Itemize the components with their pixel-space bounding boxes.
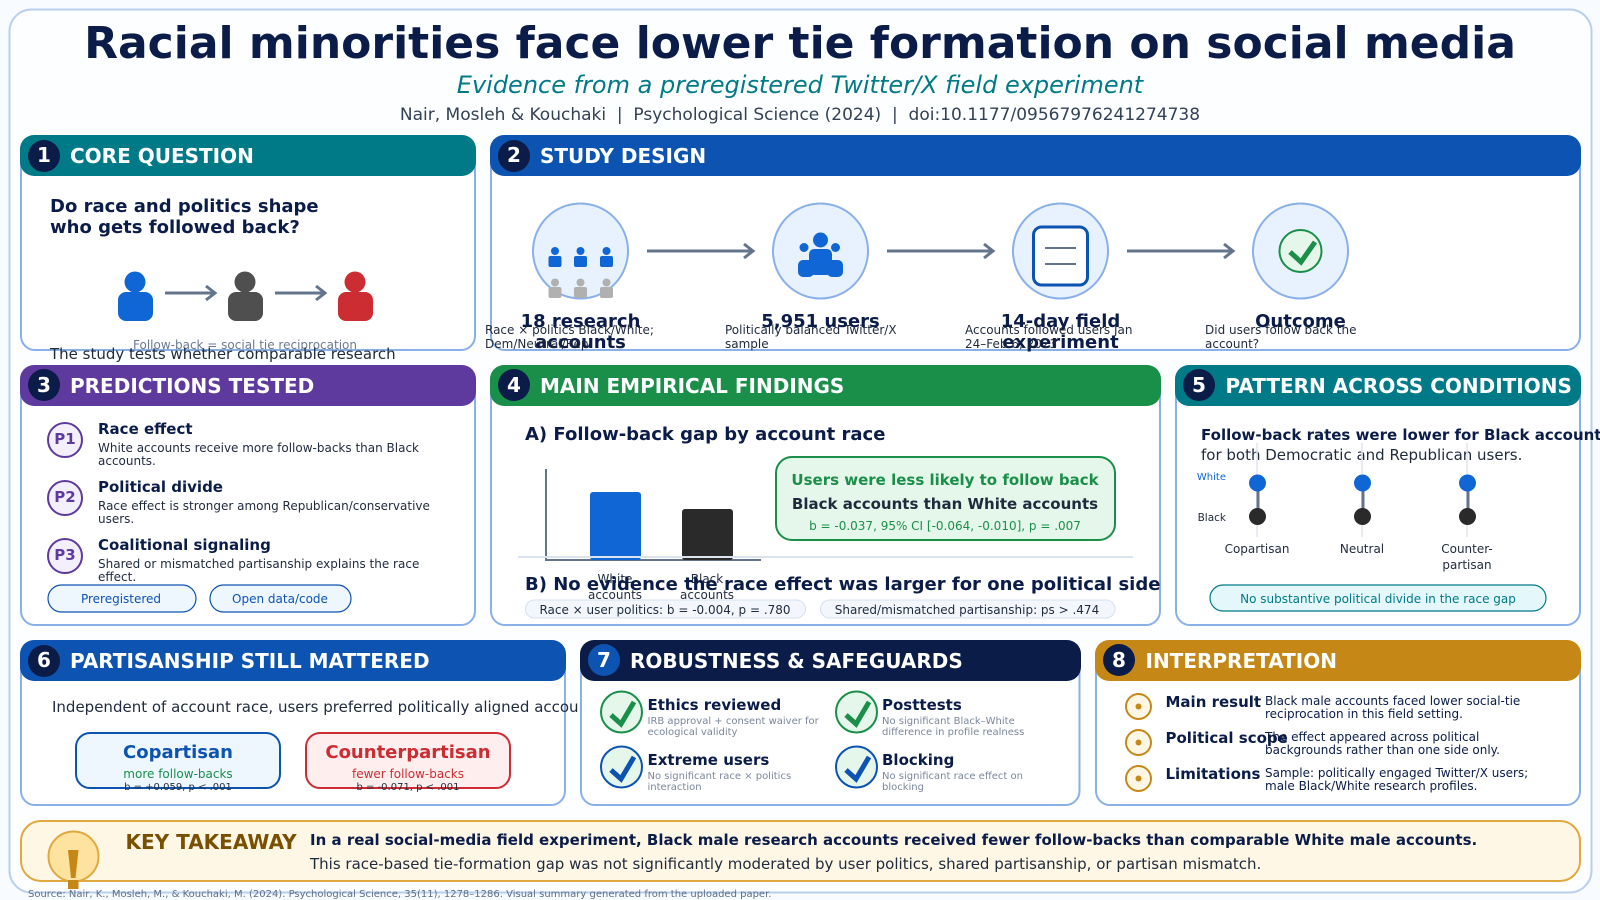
dot plot: conditions: Neutral bbox=[1340, 542, 1384, 556]
card: counterpartisan: fewer follow-backs bbox=[352, 767, 464, 781]
step label: field experiment: 14-day field bbox=[1001, 311, 1120, 332]
step text: users: sample bbox=[725, 337, 769, 351]
panel: main findings bbox=[490, 365, 1161, 625]
icon: users bbox=[773, 204, 868, 298]
bar chart: follow-back gap bbox=[518, 469, 1133, 602]
question heading: Do race and politics shape bbox=[50, 196, 319, 217]
item: political scope bbox=[1126, 729, 1500, 757]
item: ethics: Ethics reviewed bbox=[648, 696, 781, 714]
item: limitations: Limitations bbox=[1166, 765, 1261, 783]
prediction P1: White accounts receive more follow-backs than Black bbox=[98, 441, 419, 455]
header: core question: CORE QUESTION bbox=[70, 144, 254, 168]
icon: document bbox=[1013, 204, 1108, 298]
header: pattern bbox=[1175, 365, 1581, 406]
dot plot: conditions bbox=[1197, 443, 1493, 572]
header: main findings: MAIN EMPIRICAL FINDINGS bbox=[540, 374, 844, 398]
card: copartisan bbox=[76, 733, 280, 793]
header: interpretation: INTERPRETATION bbox=[1146, 649, 1337, 673]
callout: result bbox=[776, 457, 1115, 540]
intro text: The study tests whether comparable research bbox=[49, 345, 396, 363]
item: blocking bbox=[836, 746, 1023, 793]
prediction P1: Race effect bbox=[98, 420, 193, 438]
step text: field experiment: 24–Feb 6, 2023 bbox=[965, 337, 1057, 351]
item: limitations: male Black/White research profiles. bbox=[1265, 779, 1478, 793]
stat pill: interaction: Race × user politics: b = -0.004, p = .780 bbox=[539, 603, 791, 617]
takeaway subtext: This race-based tie-formation gap was not significantly moderated by user politics, shared partisanship, or partisan mismatch. bbox=[309, 855, 1261, 873]
step label: accounts: accounts bbox=[535, 332, 626, 353]
pattern text: Follow-back rates were lower for Black accounts bbox=[1201, 426, 1600, 444]
badge: open data bbox=[210, 585, 351, 612]
bar chart: follow-back gap: accounts bbox=[680, 588, 734, 602]
header: pattern: PATTERN ACROSS CONDITIONS bbox=[1226, 374, 1572, 398]
heading A: A) Follow-back gap by account race bbox=[525, 424, 885, 445]
item: political scope: The effect appeared across political bbox=[1264, 730, 1479, 744]
panel: key takeaway bbox=[21, 821, 1580, 889]
header: study design bbox=[490, 135, 1581, 176]
header: study design: STUDY DESIGN bbox=[540, 144, 706, 168]
bar chart: follow-back gap: accounts bbox=[588, 588, 642, 602]
header: interpretation: 8 bbox=[1112, 648, 1126, 672]
icon: blue person bbox=[118, 272, 153, 321]
title: Racial minorities face lower tie formation on social media bbox=[84, 18, 1516, 69]
item: extreme users: No significant race × politics bbox=[648, 771, 791, 782]
item: limitations: Sample: politically engaged Twitter/X users; bbox=[1265, 766, 1528, 780]
callout: result: Users were less likely to follow back bbox=[791, 471, 1100, 489]
step text: field experiment: Accounts followed users Jan bbox=[965, 323, 1132, 337]
prediction P3: effect. bbox=[98, 570, 136, 584]
card: copartisan: more follow-backs bbox=[123, 767, 233, 781]
partisanship text: Independent of account race, users preferred politically aligned accounts. bbox=[52, 698, 607, 716]
header: partisanship: 6 bbox=[37, 648, 51, 672]
bar chart: follow-back gap: Black bbox=[691, 572, 723, 586]
header: interpretation bbox=[1095, 640, 1581, 681]
panel: partisanship bbox=[20, 640, 607, 805]
item: extreme users: Extreme users bbox=[648, 751, 769, 769]
header: robustness: 7 bbox=[597, 648, 611, 672]
header: robustness bbox=[580, 640, 1081, 681]
item: main result: Black male accounts faced lower social-tie bbox=[1265, 694, 1520, 708]
header: partisanship: PARTISANSHIP STILL MATTERED bbox=[70, 649, 430, 673]
dot plot: conditions: partisan bbox=[1442, 558, 1492, 572]
prediction P2: Political divide bbox=[98, 478, 223, 496]
card: counterpartisan: Counterpartisan bbox=[325, 742, 491, 763]
icon: red person bbox=[338, 272, 373, 321]
step label: users: 5,951 users bbox=[761, 311, 880, 332]
heading B: B) No evidence the race effect was larger for one political side bbox=[525, 574, 1160, 595]
item: political scope: backgrounds rather than one side only. bbox=[1265, 743, 1500, 757]
citation line: Nair, Mosleh & Kouchaki | Psychological Science (2024) | doi:10.1177/09567976241274738 bbox=[400, 105, 1200, 125]
pill: no political divide bbox=[1210, 585, 1546, 611]
dot plot: conditions: Black bbox=[1198, 512, 1227, 524]
panel: predictions bbox=[20, 365, 476, 625]
panel: core question bbox=[20, 135, 476, 363]
item: blocking: blocking bbox=[882, 782, 924, 793]
icon: research accounts bbox=[533, 204, 628, 298]
prediction P2: Race effect is stronger among Republican/conservative bbox=[98, 499, 430, 513]
step text: outcome: Did users follow back the bbox=[1205, 323, 1356, 337]
item: main result bbox=[1126, 693, 1520, 721]
icon: grey person bbox=[228, 272, 263, 321]
header: main findings: 4 bbox=[507, 373, 521, 397]
item: main result: Main result bbox=[1166, 693, 1261, 711]
card: counterpartisan: b = -0.071, p < .001 bbox=[356, 782, 460, 793]
step label: field experiment: experiment bbox=[1002, 332, 1119, 353]
item: ethics bbox=[601, 692, 820, 738]
item: posttests bbox=[836, 692, 1024, 738]
callout: result: Black accounts than White accounts bbox=[792, 495, 1098, 513]
badge: preregistered: Preregistered bbox=[81, 592, 161, 606]
card: copartisan: Copartisan bbox=[123, 742, 233, 763]
header: predictions: PREDICTIONS TESTED bbox=[70, 374, 314, 398]
stat pill: interaction bbox=[526, 600, 806, 618]
header: core question bbox=[20, 135, 476, 176]
arrow bbox=[275, 286, 325, 300]
caption: follow-back: Follow-back = social tie reciprocation bbox=[133, 338, 357, 352]
prediction P3: Coalitional signaling bbox=[98, 536, 271, 554]
takeaway heading: KEY TAKEAWAY bbox=[126, 830, 297, 854]
dot plot: conditions: Counter- bbox=[1441, 542, 1493, 556]
prediction P3: Shared or mismatched partisanship explains the race bbox=[98, 557, 419, 571]
item: posttests: difference in profile realness bbox=[882, 727, 1024, 738]
prediction P1 bbox=[48, 420, 419, 468]
item: posttests: No significant Black–White bbox=[882, 716, 1015, 727]
dot plot: conditions: White bbox=[1197, 472, 1226, 483]
takeaway text: In a real social-media field experiment, Black male research accounts received fewer follow-backs than comparable White male accounts. bbox=[310, 831, 1477, 849]
header: study design: 2 bbox=[507, 143, 521, 167]
step text: outcome: account? bbox=[1205, 337, 1259, 351]
prediction P3 bbox=[48, 536, 419, 584]
panel: interpretation bbox=[1095, 640, 1581, 805]
header: main findings bbox=[490, 365, 1161, 406]
subtitle: Evidence from a preregistered Twitter/X field experiment bbox=[457, 71, 1145, 99]
item: extreme users: interaction bbox=[648, 782, 702, 793]
step label: outcome: Outcome bbox=[1255, 311, 1346, 332]
panel: pattern across conditions bbox=[1175, 365, 1600, 625]
item: main result: reciprocation in this field setting. bbox=[1265, 707, 1463, 721]
stat pill: partisanship: Shared/mismatched partisanship: ps > .474 bbox=[835, 603, 1099, 617]
panel: robustness bbox=[580, 640, 1081, 805]
item: blocking: No significant race effect on bbox=[882, 771, 1023, 782]
stat pill: partisanship bbox=[820, 600, 1115, 618]
prediction P1: accounts. bbox=[98, 454, 156, 468]
badge: open data: Open data/code bbox=[232, 592, 328, 606]
item: ethics: IRB approval + consent waiver for bbox=[648, 716, 820, 727]
header: pattern: 5 bbox=[1192, 373, 1206, 397]
prediction P3: P3 bbox=[54, 546, 76, 564]
prediction P2: users. bbox=[98, 512, 134, 526]
step text: accounts: Race × politics Black/White; bbox=[485, 323, 654, 337]
step text: users: Politically balanced Twitter/X bbox=[725, 323, 897, 337]
prediction P2: P2 bbox=[54, 488, 76, 506]
header: predictions: 3 bbox=[37, 373, 51, 397]
header: core question: 1 bbox=[37, 143, 51, 167]
arrow bbox=[647, 244, 753, 258]
header: partisanship bbox=[20, 640, 566, 681]
card: copartisan: b = +0.059, p < .001 bbox=[124, 782, 232, 793]
question heading: who gets followed back? bbox=[50, 217, 300, 238]
item: ethics: ecological validity bbox=[648, 727, 738, 738]
prediction P2 bbox=[48, 478, 430, 526]
dot plot: conditions: Copartisan bbox=[1225, 542, 1289, 556]
icon: outcome check bbox=[1253, 204, 1348, 298]
item: blocking: Blocking bbox=[882, 751, 954, 769]
icon: exclamation bbox=[48, 832, 98, 889]
panel: study design bbox=[485, 135, 1581, 353]
header: robustness: ROBUSTNESS & SAFEGUARDS bbox=[630, 649, 963, 673]
header: predictions bbox=[20, 365, 476, 406]
step label: accounts: 18 research bbox=[521, 311, 640, 332]
arrow bbox=[887, 244, 993, 258]
card: counterpartisan bbox=[306, 733, 510, 793]
pill: no political divide: No substantive political divide in the race gap bbox=[1240, 592, 1516, 606]
source line: Source: Nair, K., Mosleh, M., & Kouchaki, M. (2024). Psychological Science, 35(11), 1278–1286. Visual summary generated from the uploaded paper. bbox=[28, 889, 771, 900]
callout: result: b = -0.037, 95% CI [-0.064, -0.010], p = .007 bbox=[809, 519, 1081, 533]
arrow bbox=[1127, 244, 1233, 258]
step text: accounts: Dem/Neutral/Rep bbox=[485, 337, 588, 351]
badge: preregistered bbox=[48, 585, 196, 612]
item: political scope: Political scope bbox=[1166, 729, 1288, 747]
bar chart: follow-back gap: White bbox=[598, 572, 632, 586]
prediction P1: P1 bbox=[54, 430, 76, 448]
item: posttests: Posttests bbox=[882, 696, 962, 714]
arrow bbox=[165, 286, 215, 300]
item: limitations bbox=[1126, 765, 1528, 793]
item: extreme users bbox=[601, 746, 791, 793]
pattern text: for both Democratic and Republican users. bbox=[1201, 446, 1522, 464]
